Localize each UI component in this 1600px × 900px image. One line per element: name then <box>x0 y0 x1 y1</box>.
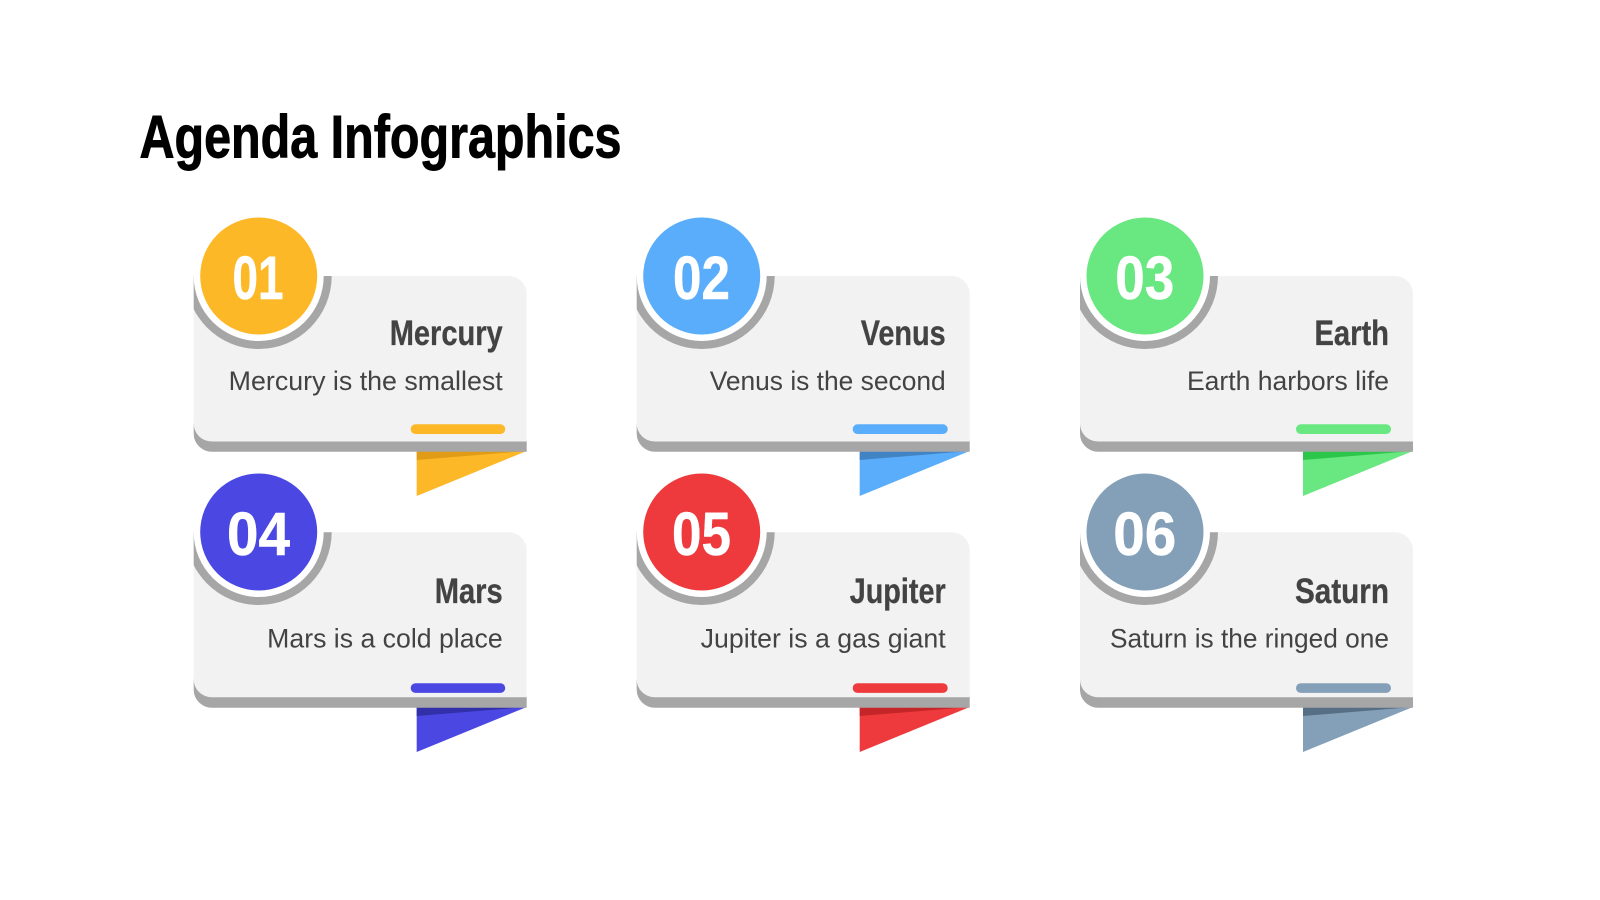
card 02: Venus <box>629 203 970 496</box>
description 01: Mercury is the smallest <box>229 366 503 396</box>
flag 01 <box>417 451 527 496</box>
badge 05 <box>637 467 767 597</box>
badge ring 06 <box>1080 532 1218 605</box>
badge ring 04 <box>194 532 332 605</box>
card body 05 <box>637 532 970 697</box>
badge ring 03 <box>1080 276 1218 349</box>
badge 04: 04 <box>227 500 290 568</box>
card 01: Mercury <box>186 203 527 496</box>
flag 02 <box>860 451 970 496</box>
flag 05 <box>860 707 970 752</box>
badge 03 <box>1080 211 1210 341</box>
flag 03 <box>1303 451 1413 496</box>
badge 02: 02 <box>673 244 730 312</box>
badge 06 <box>1080 467 1210 597</box>
flag 04 <box>417 707 527 752</box>
card 03: Earth <box>1072 203 1413 496</box>
card shadow 04 <box>194 679 527 708</box>
title: Agenda Infographics <box>140 104 622 170</box>
card 05: Jupiter <box>629 459 970 752</box>
card 06: Saturn <box>1072 459 1413 752</box>
heading 04: Mars <box>435 572 503 611</box>
card body 02 <box>637 276 970 442</box>
accent bar 01 <box>411 424 505 434</box>
description 04: Mars is a cold place <box>267 623 503 653</box>
card shadow 01 <box>194 423 527 452</box>
flag 06 <box>1303 707 1413 752</box>
heading 06: Saturn <box>1295 572 1389 611</box>
accent bar 02 <box>853 424 948 434</box>
badge 04 <box>194 467 324 597</box>
card shadow 03 <box>1080 423 1413 452</box>
description 02: Venus is the second <box>710 366 946 396</box>
accent bar 05 <box>853 683 948 693</box>
description 05: Jupiter is a gas giant <box>701 623 946 653</box>
badge 05: 05 <box>672 500 731 568</box>
badge 03: 03 <box>1115 244 1174 312</box>
card body 06 <box>1080 532 1413 697</box>
card 04: Mars <box>186 459 527 752</box>
accent bar 04 <box>411 683 505 693</box>
badge 01 <box>194 211 324 341</box>
card body 01 <box>194 276 527 442</box>
badge 06: 06 <box>1113 500 1176 568</box>
heading 01: Mercury <box>390 314 503 353</box>
card shadow 06 <box>1080 679 1413 708</box>
badge 01: 01 <box>232 244 284 312</box>
accent bar 06 <box>1296 683 1391 693</box>
badge ring 02 <box>636 276 775 349</box>
heading 03: Earth <box>1314 314 1389 353</box>
card body 03 <box>1080 276 1413 442</box>
card shadow 05 <box>637 679 970 708</box>
badge 02 <box>637 211 767 341</box>
badge ring 01 <box>194 276 332 349</box>
badge ring 05 <box>636 532 775 605</box>
accent bar 03 <box>1296 424 1391 434</box>
description 03: Earth harbors life <box>1187 366 1389 396</box>
heading 05: Jupiter <box>850 572 946 611</box>
card body 04 <box>194 532 527 697</box>
heading 02: Venus <box>861 314 946 353</box>
card shadow 02 <box>637 423 970 452</box>
description 06: Saturn is the ringed one <box>1110 623 1389 653</box>
